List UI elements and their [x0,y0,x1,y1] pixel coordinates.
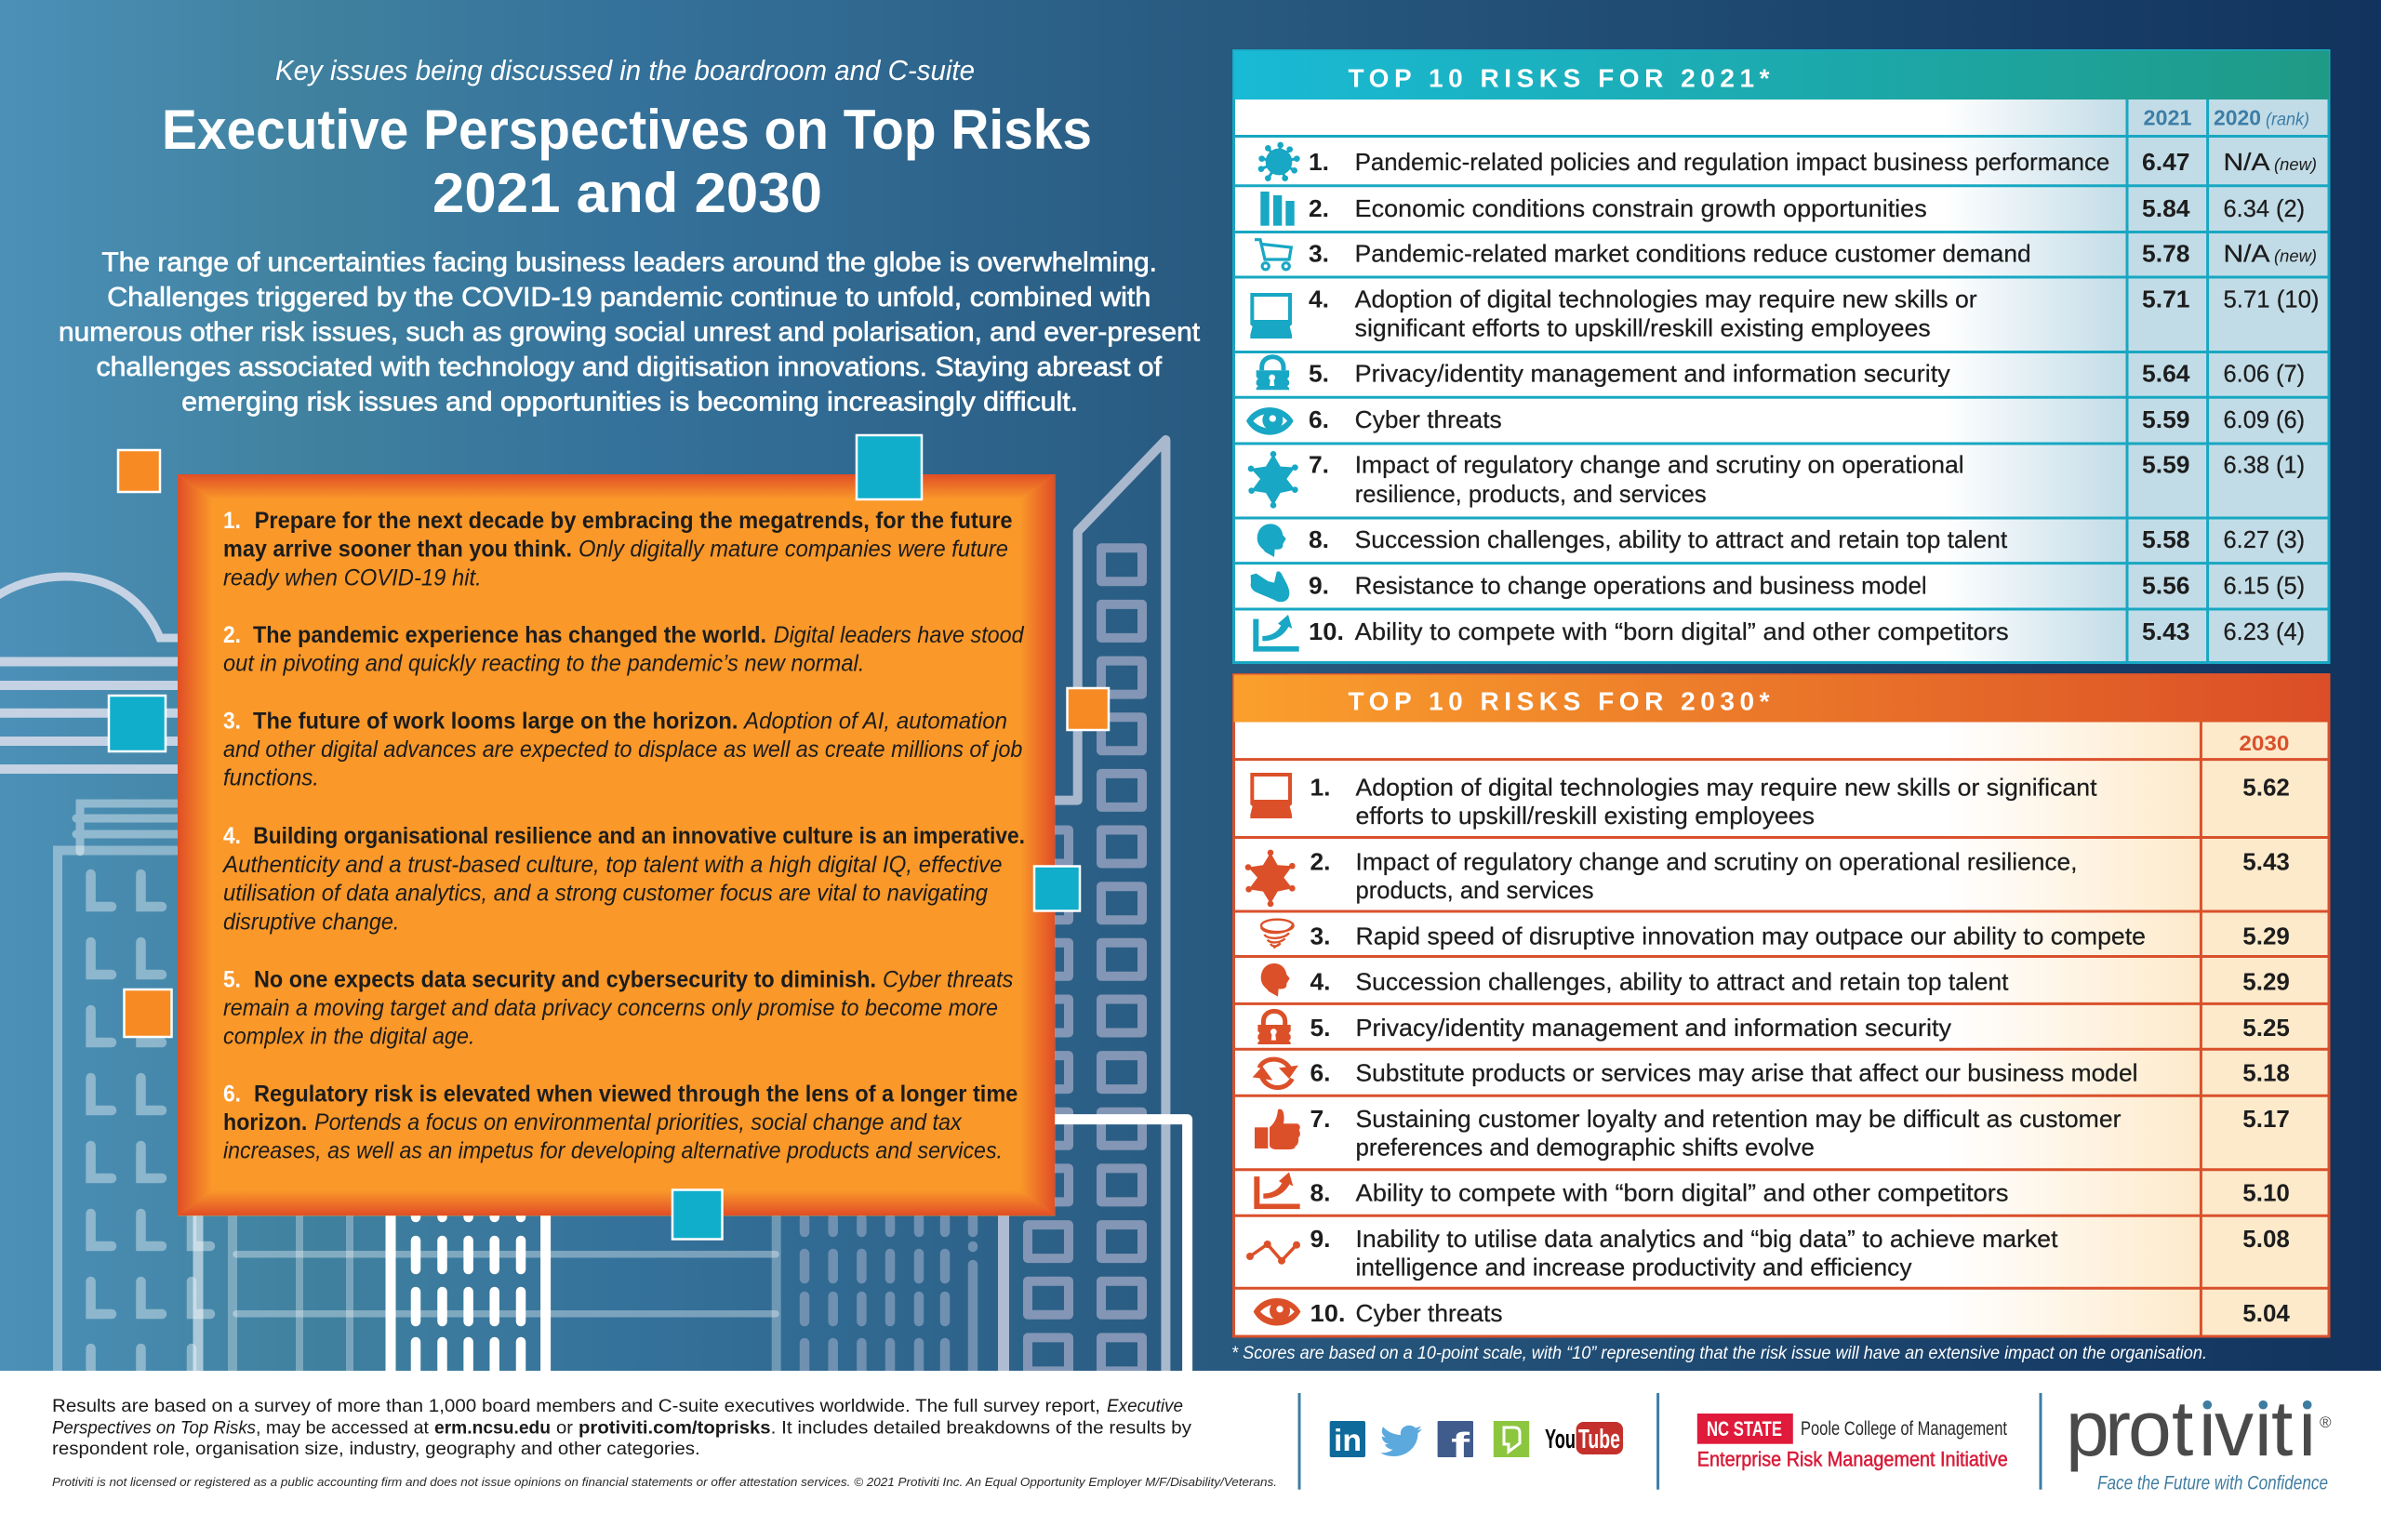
risk 8: Succession challenges, ability to attract and retain top talent [1355,525,2008,553]
title: Executive Perspectives on Top Risks [162,99,1092,161]
icon: twitter [1380,1426,1422,1456]
footer survey note: Results are based on a survey of more than 1,000 board members and C-suite executives worldwide. The full survey report, [52,1396,1100,1416]
icon: green D [1494,1421,1529,1457]
footer survey note: Perspectives on Top Risks [52,1418,256,1439]
risk 4: 5.71 (10) [2223,285,2320,312]
footer survey note: erm.ncsu.edu [434,1418,551,1439]
risk 9 [1251,571,2305,602]
risk 9: intelligence and increase productivity and efficiency [1356,1254,1912,1281]
risk 10: 10. [1309,617,1344,645]
icon: hand [1251,571,1289,602]
risk 9: 5.56 [2142,572,2189,600]
risk 5: 6.06 (7) [2223,360,2305,388]
risk 1: N/A [2223,148,2270,176]
risk 6: 6. [1309,405,1329,433]
risk 9: Inability to utilise data analytics and “big data” to achieve market [1356,1225,2058,1253]
takeaway 1: Only digitally mature companies were future [579,537,1008,563]
risk 1: efforts to upskill/reskill existing employees [1356,802,1815,830]
takeaway 2 [223,622,1025,677]
icon: thumbs up [1255,1109,1300,1149]
icon: facebook: f [1451,1427,1470,1466]
takeaway 1: Prepare for the next decade by embracing the megatrends, for the future [255,508,1013,534]
risk 10: Cyber threats [1356,1299,1503,1327]
risk 8: 6.27 (3) [2223,525,2305,553]
takeaway 4: Authenticity and a trust-based culture, top talent with a high digital IQ, effective [221,852,1003,878]
risk 1: 5.62 [2242,773,2290,801]
risk 1: 6.47 [2142,148,2189,176]
risk 4 [1250,285,2320,341]
risk 3: Pandemic-related market conditions reduce customer demand [1355,240,2031,268]
intro paragraph: Challenges triggered by the COVID-19 pandemic continue to unfold, combined with [107,283,1151,312]
icon: youtube: Tube [1578,1425,1620,1454]
intro paragraph: The range of uncertainties facing business leaders around the globe is overwhelming. [101,248,1157,278]
risk 8: 5.58 [2142,525,2189,553]
risk 9: 5.08 [2242,1225,2290,1253]
risk 4: 5.29 [2242,967,2290,995]
risk 7: resilience, products, and services [1355,480,1707,508]
risk 5: Privacy/identity management and information security [1355,360,1950,388]
risk 3 [1261,920,2290,949]
column headings: (rank) [2266,111,2309,130]
risk 10: 6.23 (4) [2223,617,2305,645]
risk 10: Ability to compete with “born digital” and other competitors [1355,617,2009,645]
takeaway 5: complex in the digital age. [223,1024,474,1050]
risk 2: 2. [1309,194,1329,222]
takeaway 4: 4. [223,823,241,849]
risk 2: 2. [1310,847,1330,875]
icon: virus [1258,142,1300,181]
title: 2021 and 2030 [432,162,822,224]
takeaway 2: 2. [223,622,241,648]
risk 3: N/A [2223,240,2270,268]
intro paragraph: challenges associated with technology and digitisation innovations. Staying abreast of [97,352,1163,382]
risk 8: 8. [1310,1179,1330,1207]
takeaway 6: Portends a focus on environmental priorities, social change and tax [314,1109,963,1135]
risk 3: Rapid speed of disruptive innovation may outpace our ability to compete [1356,922,2146,949]
risk 6 [1246,405,2305,435]
protiviti logo: ® [2320,1414,2332,1431]
risk 2: Impact of regulatory change and scrutiny on operational resilience, [1356,847,2078,875]
risk 6: Substitute products or services may arise that affect our business model [1356,1059,2137,1087]
risk 1: Pandemic-related policies and regulation impact business performance [1355,148,2109,176]
icon: tornado [1261,920,1294,948]
footer survey note [52,1396,1191,1459]
risk 1: (new) [2274,155,2317,174]
takeaway 1: 1. [223,508,241,534]
header band 2021 [1233,50,2329,100]
protiviti logo: protiviti [2066,1385,2316,1472]
risk 6: 5.18 [2242,1059,2290,1087]
risk 9 [1246,1225,2290,1281]
takeaway 2: out in pivoting and quickly reacting to the pandemic’s new normal. [223,651,864,677]
column headings: 2021 [2143,106,2192,130]
takeaway 5: 5. [223,966,241,992]
risk 10: 5.04 [2242,1299,2290,1327]
footer survey note: , may be accessed at [256,1418,430,1439]
NC State logo: Poole College of Management [1801,1418,2007,1440]
risk 7 [1248,451,2305,509]
takeaway 6: increases, as well as an impetus for developing alternative products and services. [223,1138,1003,1164]
risk 4: 4. [1309,285,1329,312]
icon: sheriff star [1245,850,1296,907]
takeaway 3: Adoption of AI, automation [742,708,1007,734]
icon: youtube [1545,1422,1623,1454]
risk 1: 1. [1310,773,1330,801]
takeaway 4: disruptive change. [223,909,399,935]
intro paragraph: numerous other risk issues, such as growing social unrest and polarisation, and ever-present [59,318,1200,348]
takeaway 1 [223,508,1013,591]
icon: eye [1246,407,1294,435]
risk 9: 9. [1309,572,1329,600]
risk 4: 5.71 [2142,285,2189,312]
risk 7: preferences and demographic shifts evolve [1356,1134,1815,1162]
risk 2: products, and services [1356,876,1594,904]
icon: head silhouette [1261,963,1290,997]
takeaway 6: 6. [223,1081,241,1107]
risk 10: 5.43 [2142,617,2189,645]
column headings: 2020 [2214,106,2261,130]
icon: refresh arrows [1253,1059,1298,1088]
risk 3: 5.29 [2242,922,2290,949]
footer survey note: Executive [1107,1396,1183,1416]
takeaway 3: 3. [223,708,241,734]
icon: sheriff star [1248,451,1298,509]
risk 5: Privacy/identity management and information security [1356,1014,1951,1042]
NC State logo [1697,1414,2008,1471]
risk 6: 6. [1310,1059,1330,1087]
title [162,99,1092,224]
takeaway 5: remain a moving target and data privacy concerns only promise to become more [223,995,998,1021]
takeaway 6: horizon. [223,1109,307,1135]
risk 8 [1254,1172,2290,1209]
risk 1 [1258,142,2317,181]
footer survey note: respondent role, organisation size, industry, geography and other categories. [52,1439,700,1459]
risk 5: 5. [1309,360,1329,388]
risk 2: 6.34 (2) [2223,194,2305,222]
footer survey note: . It includes detailed breakdowns of the results by [771,1418,1191,1439]
risk 4: significant efforts to upskill/reskill existing employees [1355,313,1931,341]
subtitle: Key issues being discussed in the boardroom and C-suite [275,54,975,86]
risk 2: 5.43 [2242,847,2290,875]
risk 5 [1257,357,2305,390]
icon: facebook [1438,1421,1473,1466]
risk 3: 3. [1309,240,1329,268]
risk 7: 5.59 [2142,451,2189,479]
risk 8: Ability to compete with “born digital” and other competitors [1356,1179,2009,1207]
takeaway 2: Digital leaders have stood [774,622,1025,648]
risk 3 [1255,240,2317,270]
risk 10 [1254,1298,2290,1327]
column headings [2143,106,2309,130]
header band 2030 [1233,675,2329,722]
risk 7: 6.38 (1) [2223,451,2305,479]
takeaway 3: and other digital advances are expected to displace as well as create millions of job [223,737,1022,763]
risk 7: Impact of regulatory change and scrutiny on operational [1355,451,1964,479]
takeaway 5: Cyber threats [883,966,1013,992]
risk 1: 1. [1309,148,1329,176]
risk 4: Adoption of digital technologies may require new skills or [1355,285,1977,312]
NC State logo: Enterprise Risk Management Initiative [1697,1448,2008,1471]
panel: key takeaways [178,474,1055,1215]
icon: linkedin: in [1334,1423,1362,1457]
takeaway 1: may arrive sooner than you think. [223,537,572,563]
takeaway 3: The future of work looms large on the horizon. [253,708,738,734]
intro paragraph [59,248,1200,418]
risk 2: 5.84 [2142,194,2190,222]
risk 8 [1257,524,2305,557]
icon: bar chart [1260,192,1295,226]
takeaway 2: The pandemic experience has changed the world. [253,622,766,648]
risk 3: (new) [2274,247,2317,266]
decorative squares [109,435,1109,1239]
risk 4: Succession challenges, ability to attract and retain top talent [1356,967,2009,995]
risk 2 [1245,847,2290,907]
takeaway 5: No one expects data security and cybersecurity to diminish. [254,966,876,992]
takeaway 4 [221,823,1025,935]
icon: eye [1254,1298,1300,1325]
icon: padlock [1257,357,1289,390]
social media icons [1330,1421,1623,1466]
takeaway 1: ready when COVID-19 hit. [223,564,482,591]
risk 5: 5. [1310,1014,1330,1042]
risk 10: 10. [1310,1299,1345,1327]
risk 7: 5.17 [2242,1105,2290,1133]
risk 6: Cyber threats [1355,405,1502,433]
NC State logo: NC STATE [1707,1417,1782,1440]
icon: computer [1250,773,1292,818]
icon: padlock [1257,1011,1291,1044]
risk 9: Resistance to change operations and business model [1355,572,1927,600]
icon: youtube: You [1545,1425,1576,1454]
panel: top 10 risks for 2021 [1233,50,2329,662]
risk 2: Economic conditions constrain growth opportunities [1355,194,1927,222]
risk 10 [1253,615,2305,652]
footnote: * Scores are based on a 10-point scale, with “10” representing that the risk issue will have an extensive impact on the organisation. [1231,1344,2207,1363]
takeaway 5 [223,966,1013,1050]
footer background [0,1371,2381,1540]
risk 5: 5.25 [2242,1014,2290,1042]
risk 1 [1250,773,2290,830]
icon: computer [1250,293,1292,339]
risk 7 [1255,1105,2290,1162]
protiviti logo: Face the Future with Confidence [2097,1473,2328,1494]
city skyline illustration [0,440,1188,1376]
takeaway 3 [223,708,1022,791]
takeaway 4: Building organisational resilience and an innovative culture is an imperative. [253,823,1025,849]
icon: head silhouette [1257,524,1286,557]
intro paragraph: emerging risk issues and opportunities is becoming increasingly difficult. [181,388,1078,418]
risk 4 [1261,963,2290,997]
risk 3: 5.78 [2142,240,2189,268]
header band 2021: TOP 10 RISKS FOR 2021* [1349,64,1770,93]
risk 1: Adoption of digital technologies may require new skills or significant [1356,773,2097,801]
risk 5 [1257,1011,2290,1044]
risk 5: 5.64 [2142,360,2190,388]
icon: analytics line [1246,1241,1300,1265]
risk 8: 5.10 [2242,1179,2290,1207]
takeaway 3: functions. [223,765,319,791]
footer dividers [1299,1393,2041,1490]
risk 7: 7. [1310,1105,1330,1133]
footer survey note: protiviti.com/toprisks [579,1418,771,1439]
risk 6: 6.09 (6) [2223,405,2305,433]
takeaway 6 [223,1081,1018,1164]
takeaway 6: Regulatory risk is elevated when viewed through the lens of a longer time [254,1081,1018,1107]
panel: top 10 risks for 2030 [1233,675,2329,1336]
risk 2 [1260,192,2305,226]
column heading 2030: 2030 [2239,731,2289,755]
icon: growth chart [1254,1172,1300,1209]
risk 7: 7. [1309,451,1329,479]
icon: growth chart [1253,615,1299,652]
risk 4: 4. [1310,967,1330,995]
footer legal note: Protiviti is not licensed or registered as a public accounting firm and does not issue opinions on financial statements or offer attestation services. © 2021 Protiviti Inc. An Equal Opportunity Employer M/F/Disability/Veterans. [52,1475,1277,1489]
icon: shopping cart [1255,240,1291,270]
takeaway 4: utilisation of data analytics, and a strong customer focus are vital to navigating [223,881,988,907]
risk 9: 6.15 (5) [2223,572,2305,600]
risk 3: 3. [1310,922,1330,949]
risk 6: 5.59 [2142,405,2189,433]
risk 7: Sustaining customer loyalty and retention may be difficult as customer [1356,1105,2122,1133]
risk 9: 9. [1310,1225,1330,1253]
header band 2030: TOP 10 RISKS FOR 2030* [1349,686,1770,715]
footer survey note: or [556,1418,574,1439]
risk 8: 8. [1309,525,1329,553]
